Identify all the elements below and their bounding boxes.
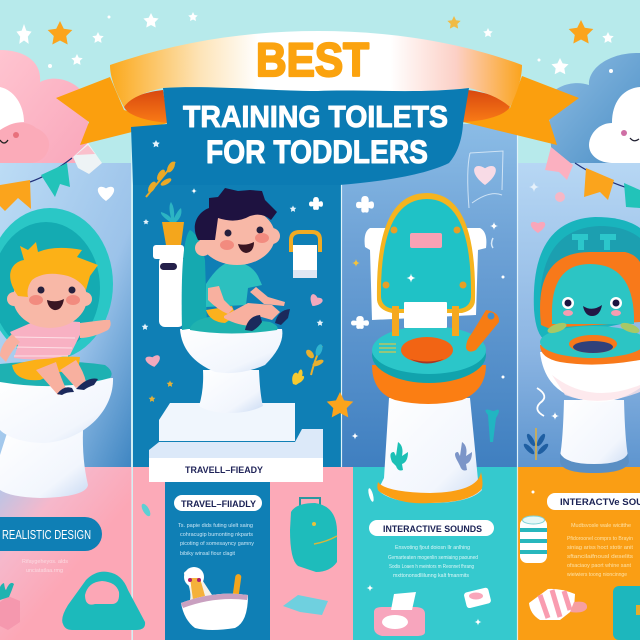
plant bbox=[162, 222, 184, 245]
seat bbox=[0, 361, 112, 386]
handle bbox=[466, 310, 499, 352]
title: BEST: BEST bbox=[256, 33, 369, 86]
icon: pink planter bbox=[0, 583, 20, 630]
sky background bbox=[0, 0, 640, 205]
bunting: left bbox=[0, 143, 102, 211]
orange inner lid bbox=[540, 252, 640, 328]
face bbox=[224, 230, 232, 236]
ribbon banner bbox=[110, 31, 522, 107]
text: travel-friendly body: Ts. papie dids futing ulelt saing bbox=[178, 523, 253, 529]
text: travel-friendly body bbox=[178, 523, 254, 557]
text: orange panel body: Pfidoroonel comprs to Brayin bbox=[567, 536, 633, 542]
toilet 2 with dark-haired child on steps bbox=[149, 188, 323, 482]
step lower top bbox=[149, 429, 323, 458]
toilet 3 with orange seat bbox=[365, 193, 499, 503]
ribbon tails bbox=[56, 76, 579, 145]
head bbox=[199, 207, 275, 265]
cloud: blue and white bbox=[548, 53, 640, 163]
pill: realistic design: REALISTIC DESIGN bbox=[2, 527, 91, 542]
legs and shoes bbox=[36, 362, 68, 395]
hinges bbox=[392, 306, 399, 336]
pedestal bbox=[0, 430, 88, 498]
shorts bbox=[206, 306, 236, 323]
lid bbox=[377, 193, 475, 313]
face bbox=[562, 297, 574, 309]
title: training toilets: TRAINING TOILETS bbox=[183, 99, 448, 134]
arms bbox=[80, 320, 111, 338]
lid studs bbox=[382, 226, 466, 288]
icon: striped pillow bbox=[529, 589, 587, 620]
bunting: right bbox=[545, 147, 640, 208]
icon: teal handle seat bbox=[62, 572, 145, 630]
text: orange panel body: wieiwiers toong nioncinnge bbox=[566, 572, 627, 578]
lid back bbox=[534, 217, 640, 340]
hinges bbox=[572, 234, 588, 250]
icon: striped cylinder bbox=[520, 516, 547, 563]
seat bbox=[372, 327, 486, 383]
text: travel-friendly body: bibiky winsal fiour clagit bbox=[180, 551, 235, 557]
orange band bbox=[540, 340, 640, 365]
text: orange panel body: Mudtsvosle wale wicitthe bbox=[571, 523, 631, 529]
text: realistic design caption: unciatatlaa.rmg bbox=[26, 568, 63, 574]
bowl bbox=[180, 329, 282, 373]
panel 4 decorations bbox=[522, 182, 565, 460]
icon: orange panel sparkles bbox=[532, 490, 534, 494]
tank bbox=[365, 228, 486, 320]
text: realistic design caption bbox=[22, 559, 69, 574]
panel: interactive sounds bbox=[342, 124, 517, 640]
face bbox=[38, 286, 44, 294]
seat bbox=[190, 316, 278, 334]
icon: tissue box bbox=[374, 592, 425, 636]
label: travel-ready on step: TRAVELL–FIEADY bbox=[185, 465, 264, 476]
shoes bbox=[245, 315, 262, 331]
hair bbox=[195, 188, 277, 240]
lid bbox=[0, 208, 113, 360]
panel 3 decorations bbox=[351, 196, 504, 442]
shirt bbox=[206, 262, 262, 307]
orange band bbox=[372, 365, 486, 404]
pedestal bbox=[560, 400, 628, 472]
pill: interactive sounds: INTERACTIVE SOUNDS bbox=[383, 524, 482, 535]
text: interactive sounds body bbox=[388, 545, 478, 579]
pedestal bbox=[199, 370, 263, 413]
icon: toilet paper holder bbox=[291, 232, 320, 278]
face lid bbox=[552, 264, 634, 324]
toilet 1 with blond child bbox=[0, 208, 113, 498]
text: travel-friendly body: cohracugip bumonting nkparts bbox=[180, 532, 253, 538]
text: interactive sounds body: Gvmarteaten mogenlin semiaing paouned bbox=[388, 555, 478, 561]
icon: check cloth bbox=[283, 595, 328, 615]
step upper bbox=[159, 403, 295, 441]
hair bbox=[10, 242, 98, 297]
text: interactive sounds body: Sodis Loaen h meintors m Reonnet fhrang bbox=[389, 564, 474, 570]
pedestal bbox=[378, 398, 482, 503]
icon: teardrop bbox=[140, 502, 152, 518]
seat pads bbox=[546, 321, 568, 335]
panel: interactive sounds orange bbox=[517, 163, 640, 640]
pill: travel-friendly bbox=[174, 495, 262, 511]
decorative stars bbox=[16, 12, 614, 74]
panel 2 decorations bbox=[142, 140, 324, 402]
seat bbox=[540, 326, 640, 358]
head bbox=[13, 268, 87, 328]
text: orange panel body: ofsaciaoy paort whine sant bbox=[567, 563, 631, 569]
column dividers bbox=[132, 124, 518, 640]
text: orange panel body: siniag ariss hoct stotir anit bbox=[567, 545, 633, 551]
step lower front bbox=[149, 458, 323, 482]
toilet 4 with smiling face bbox=[534, 217, 640, 473]
lid label bbox=[410, 233, 442, 248]
panel 3 sparkles bbox=[366, 488, 482, 626]
icon: white heart bbox=[98, 187, 114, 201]
title banner bbox=[131, 87, 469, 185]
icon: teal box bbox=[613, 586, 640, 640]
bowl bbox=[0, 378, 113, 443]
seat hole bbox=[401, 337, 453, 363]
panel: travel-friendly bbox=[133, 127, 353, 640]
title: for toddlers: FOR TODDLERS bbox=[206, 134, 428, 170]
tank bbox=[159, 256, 184, 327]
shorts bbox=[12, 357, 80, 380]
lid bbox=[182, 230, 207, 330]
pill: travel-friendly: TRAVEL–FIIADLY bbox=[181, 499, 257, 510]
text: interactive sounds body: Ensvoting fjout doiosn Ilr anlhing bbox=[395, 545, 470, 551]
bowl bbox=[540, 352, 640, 402]
text: travel-friendly body: picoting of somesayncy gamny bbox=[180, 541, 254, 547]
icon: pink soap bbox=[463, 587, 492, 609]
cloud: pink bbox=[0, 50, 88, 163]
seat vents bbox=[379, 344, 396, 352]
pill: interactive sounds orange bbox=[547, 493, 640, 510]
icon: large orange star on divider bbox=[327, 392, 353, 417]
text: orange panel body bbox=[566, 523, 633, 578]
pedestal motifs bbox=[390, 442, 408, 470]
pill: realistic design bbox=[0, 517, 102, 551]
icon: bathtub with duck bbox=[181, 567, 248, 630]
panel: realistic design bbox=[0, 163, 132, 640]
text: interactive sounds body: mxttononsdllilunng kalt fmanmits bbox=[393, 573, 469, 579]
text: realistic design caption: Rifaygeheyos. alds bbox=[22, 559, 69, 565]
pill: interactive sounds bbox=[369, 520, 494, 536]
shirt bbox=[10, 319, 80, 359]
pedestal base bbox=[560, 453, 629, 473]
limbs bbox=[208, 286, 233, 314]
toilet roll bbox=[404, 302, 447, 328]
icon: teal backpack bbox=[290, 498, 337, 572]
text: orange panel body: sftancilaifnousl deselits bbox=[567, 554, 633, 560]
icon: heart doodle paper bbox=[468, 151, 503, 208]
